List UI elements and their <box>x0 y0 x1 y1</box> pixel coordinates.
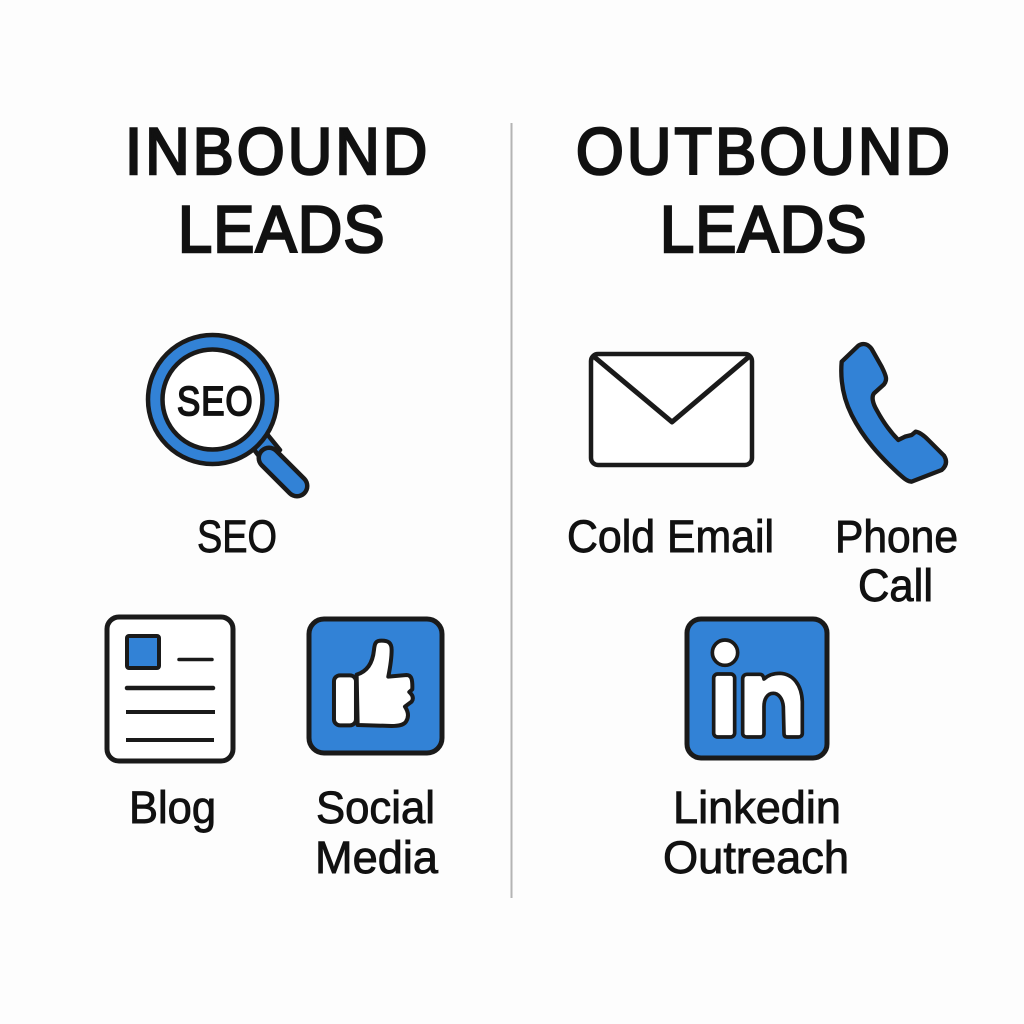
icon: SEO magnifying glass <box>148 335 297 486</box>
heading: inbound leads: INBOUND <box>125 114 427 188</box>
icon: cold email envelope <box>591 354 752 465</box>
heading: outbound leads: OUTBOUND <box>576 114 950 188</box>
label: social media: Social <box>316 782 435 833</box>
label: cold email: Cold Email <box>567 511 774 562</box>
label: phone call <box>835 511 958 611</box>
heading: outbound leads <box>576 114 950 266</box>
label: linkedin outreach <box>663 782 849 883</box>
heading: inbound leads: LEADS <box>178 192 384 266</box>
panel: inbound leads <box>107 114 442 883</box>
heading: inbound leads <box>125 114 427 266</box>
label: social media: Media <box>315 832 439 883</box>
label: blog: Blog <box>129 782 216 833</box>
icon: phone handset <box>841 344 946 482</box>
label: SEO: SEO <box>197 511 277 562</box>
label: linkedin outreach: Linkedin <box>673 782 841 833</box>
label: linkedin outreach: Outreach <box>663 832 849 883</box>
icon: blog document <box>107 617 233 761</box>
icon: linkedin logo <box>687 619 827 758</box>
icon: SEO magnifying glass: SEO <box>177 379 253 425</box>
panel: outbound leads <box>567 114 958 883</box>
heading: outbound leads: LEADS <box>660 192 866 266</box>
label: social media <box>315 782 439 883</box>
icon: social media thumbs up <box>309 619 442 753</box>
label: phone call: Phone <box>835 511 958 562</box>
label: phone call: Call <box>858 560 933 611</box>
